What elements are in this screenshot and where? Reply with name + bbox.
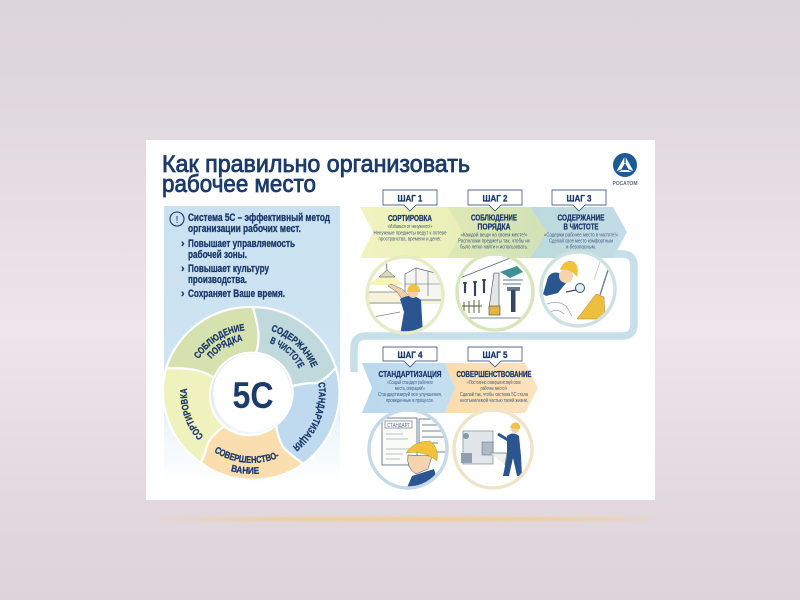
icon: worker at cabinet	[367, 257, 443, 335]
step 2 label: ШАГ 2	[482, 194, 508, 204]
wheel centre label: 5С	[232, 375, 274, 416]
info text: ›	[181, 263, 185, 275]
icon: standard document and worker: СТАНДАРТ	[387, 423, 410, 429]
step 1 label: ШАГ 1	[398, 194, 423, 204]
step 4 text	[378, 369, 442, 404]
step 2 text	[458, 212, 530, 250]
info text: Система 5С – эффективный метод	[188, 212, 330, 224]
info text: ›	[181, 238, 185, 250]
poster panel	[146, 140, 655, 500]
logo: Rosatom: РОСАТОМ	[612, 181, 638, 187]
step 4 label	[383, 347, 437, 367]
info text: производства.	[188, 274, 247, 286]
wheel segment labels: ПОРЯДКА	[206, 334, 243, 359]
info text: организации рабочих мест.	[188, 223, 301, 235]
title: рабочее место	[162, 171, 316, 198]
icon: standard document and worker	[369, 410, 448, 490]
step 1	[360, 190, 462, 335]
info text: Повышает культуру	[188, 263, 269, 275]
step 5 text: Сделай так, чтобы система 5С стала	[460, 391, 528, 398]
step 5 label	[468, 347, 522, 367]
step 3 text: СОДЕРЖАНИЕ	[558, 212, 605, 222]
step 1 text: Ненужные предметы ведут к потере	[374, 230, 447, 236]
arrow banner 4	[362, 363, 455, 413]
wheel segment labels	[180, 324, 326, 474]
arrow banner 2	[447, 207, 547, 258]
info text: Сохраняет Ваше время.	[188, 288, 285, 300]
arrow banner 5	[445, 363, 538, 413]
step 2 text: СОБЛЮДЕНИЕ	[471, 212, 517, 222]
arrow: connector band between rows	[354, 254, 634, 372]
step 1 text: пространства, времени и денег.	[378, 236, 442, 242]
arrow banner 3	[530, 207, 627, 258]
step 1 text: СОРТИРОВКА	[388, 213, 432, 223]
step 4 text: «Создай стандарт рабочего	[387, 379, 433, 386]
step 3	[530, 190, 627, 326]
panel: 5S info	[164, 206, 340, 486]
step 1 label	[383, 190, 437, 211]
step 4 text: места, операций!»	[395, 385, 425, 392]
step 3 text: В ЧИСТОТЕ	[564, 222, 599, 232]
wheel segment labels: СТАНДАРТИЗАЦИЯ	[292, 382, 326, 452]
step 1 text	[374, 213, 447, 242]
wheel segment labels: СОБЛЮДЕНИЕ	[194, 324, 245, 358]
step 4 text: СТАНДАРТИЗАЦИЯ	[378, 369, 442, 379]
step 5	[445, 347, 538, 488]
step 4 text: проведенные в процессе.	[386, 398, 434, 404]
title: Как правильно организовать	[162, 151, 470, 178]
step 3 text: «Содержи рабочее место в чистоте!»	[544, 232, 618, 238]
step 5 text	[456, 369, 532, 404]
step 5 text: «Постоянно совершенствуй свое	[467, 379, 521, 386]
step 3 label: ШАГ 3	[566, 194, 592, 204]
wheel segment labels: СОВЕРШЕНСТВО-	[215, 447, 278, 464]
decorative glow line under the poster	[150, 517, 670, 521]
arrow banner 1	[360, 207, 462, 258]
icon: exclamation: !	[176, 215, 178, 226]
wheel segment labels: В ЧИСТОТЕ	[270, 336, 305, 368]
step 5 text: неотъемлемой частью твоей жизни.	[460, 397, 528, 404]
logo: Rosatom	[612, 153, 638, 187]
info text: рабочей зоны.	[188, 249, 247, 261]
step 2 text: ПОРЯДКА	[478, 222, 510, 232]
icon: tool board	[457, 254, 533, 330]
step 2	[447, 190, 547, 330]
wheel segment labels: СОРТИРОВКА	[180, 388, 202, 440]
wheel segment labels: СОДЕРЖАНИЕ	[272, 325, 318, 368]
step 5 label: ШАГ 5	[482, 350, 508, 361]
icon: worker at machine	[454, 410, 532, 488]
info text: Повышает управляемость	[188, 238, 295, 250]
icon: inspector and broom	[541, 252, 615, 326]
title	[162, 151, 470, 198]
chart: 5S wheel	[164, 306, 340, 479]
step 2 text: было легко найти и использовать.	[460, 244, 528, 250]
icon: exclamation	[170, 212, 184, 226]
step 1 text: «Избавься от ненужного!»	[388, 224, 433, 230]
info text: ›	[181, 288, 185, 300]
info text	[181, 212, 330, 300]
step 3 text: и безопасным.	[566, 244, 596, 250]
step 3 text	[544, 212, 618, 250]
step 2 text: «Каждой вещи на своем месте!»	[460, 232, 528, 238]
step 2 text: Расположи предметы так, чтобы их	[458, 238, 530, 244]
step 4	[362, 347, 455, 490]
wheel segment labels: ВАНИЕ	[231, 464, 260, 474]
step 4 label: ШАГ 4	[398, 350, 423, 361]
step 3 text: Сделай свое место комфортным	[549, 238, 613, 244]
step 5 text: рабочее место!»	[480, 386, 508, 392]
step 4 text: Стандартизируй все улучшения,	[378, 391, 442, 398]
step 5 text: СОВЕРШЕНСТВОВАНИЕ	[456, 369, 532, 379]
